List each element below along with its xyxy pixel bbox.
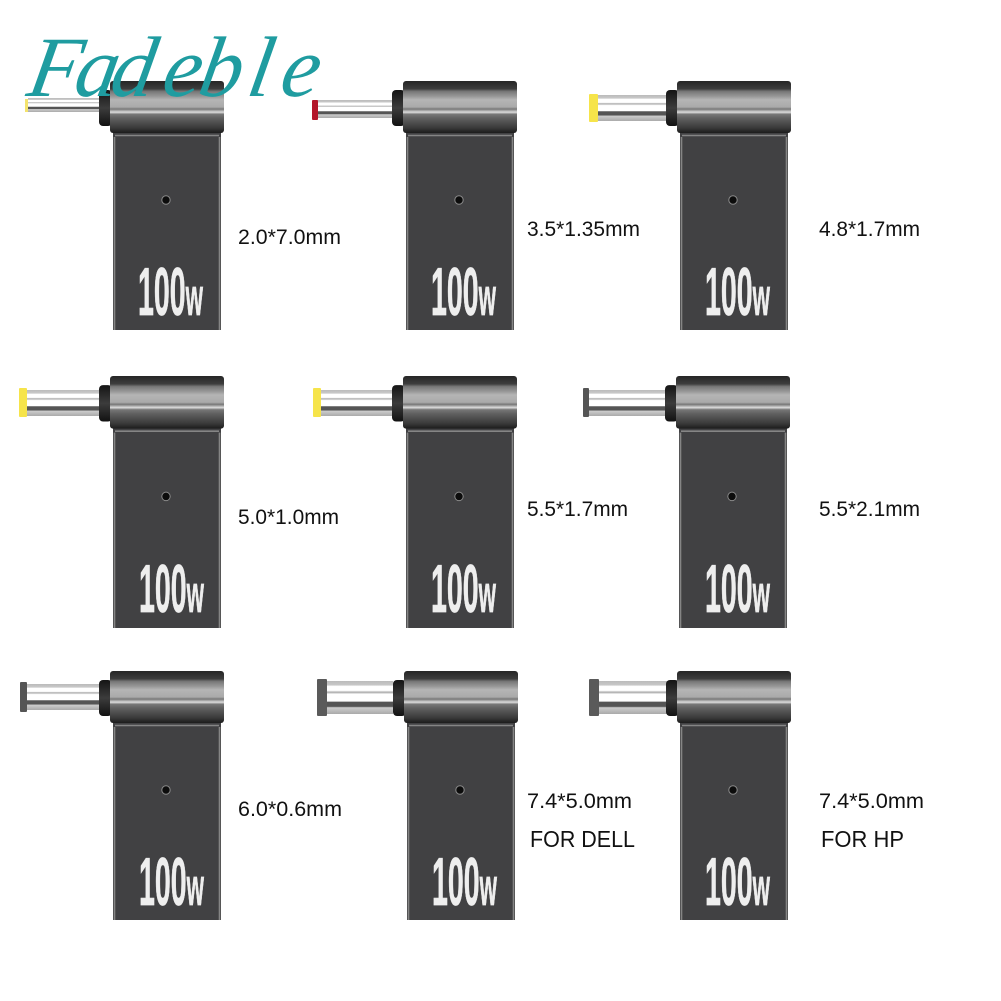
- pin: [588, 390, 665, 416]
- label: 5.5*1.7mm: 5.5*1.7mm: [527, 498, 628, 521]
- wattage mark: 100w: [139, 551, 204, 627]
- adapter: 2.0*7.0mm: [25, 81, 224, 330]
- label: 2.0*7.0mm: 2.0*7.0mm: [238, 226, 341, 249]
- connector body: [99, 376, 224, 628]
- wattage mark: 100w: [705, 551, 770, 627]
- wattage mark: 100w: [431, 551, 496, 627]
- pin: [317, 100, 393, 118]
- connector body: [392, 376, 517, 628]
- pin: [598, 681, 667, 714]
- adapter: 5.0*1.0mm: [19, 376, 224, 628]
- connector body: [666, 81, 791, 330]
- pin tip: [25, 99, 28, 112]
- connector body: [392, 81, 517, 330]
- pin tip: [589, 94, 598, 122]
- pin tip: [19, 388, 27, 417]
- adapter: 3.5*1.35mm: [312, 81, 517, 330]
- label: 5.0*1.0mm: 5.0*1.0mm: [238, 506, 339, 529]
- adapter: 6.0*0.6mm: [20, 671, 224, 920]
- connector body: [393, 671, 518, 920]
- connector body: [666, 671, 791, 920]
- connector body: [99, 671, 224, 920]
- adapter: 5.5*1.7mm: [313, 376, 517, 628]
- adapter: 7.4*5.0mm for HP: [589, 671, 791, 920]
- pin: [596, 95, 667, 121]
- pin tip: [317, 679, 327, 716]
- pin tip: [589, 679, 599, 716]
- label: 4.8*1.7mm: 4.8*1.7mm: [819, 218, 920, 241]
- connector body: [99, 81, 224, 330]
- pin: [26, 390, 99, 416]
- wattage mark: 100w: [705, 254, 770, 330]
- wattage mark: 100w: [431, 254, 496, 330]
- label: for Dell: FOR DELL: [530, 826, 635, 852]
- wattage mark: 100w: [138, 254, 203, 330]
- adapter: 5.5*2.1mm: [583, 376, 790, 628]
- pin: [28, 98, 101, 112]
- wattage mark: 100w: [139, 844, 204, 920]
- wattage mark: 100w: [705, 844, 770, 920]
- wattage mark: 100w: [432, 844, 497, 920]
- pin tip: [312, 100, 318, 120]
- label: 5.5*2.1mm: 5.5*2.1mm: [819, 498, 920, 521]
- connector body: [665, 376, 790, 628]
- pin: [26, 684, 101, 710]
- pin tip: [583, 388, 589, 417]
- pin tip: [20, 682, 27, 712]
- label: 3.5*1.35mm: 3.5*1.35mm: [527, 218, 640, 241]
- label: 7.4*5.0mm Dell: 7.4*5.0mm: [527, 790, 632, 813]
- pin: [319, 390, 393, 416]
- pin tip: [313, 388, 321, 417]
- pin: [326, 681, 393, 714]
- adapter: 7.4*5.0mm for Dell: [317, 671, 518, 920]
- label: 7.4*5.0mm HP: 7.4*5.0mm: [819, 790, 924, 813]
- label: 6.0*0.6mm: 6.0*0.6mm: [238, 798, 342, 821]
- brand logo: Fadeble: [21, 20, 330, 115]
- label: for HP: FOR HP: [821, 826, 904, 852]
- adapter: 4.8*1.7mm: [589, 81, 791, 330]
